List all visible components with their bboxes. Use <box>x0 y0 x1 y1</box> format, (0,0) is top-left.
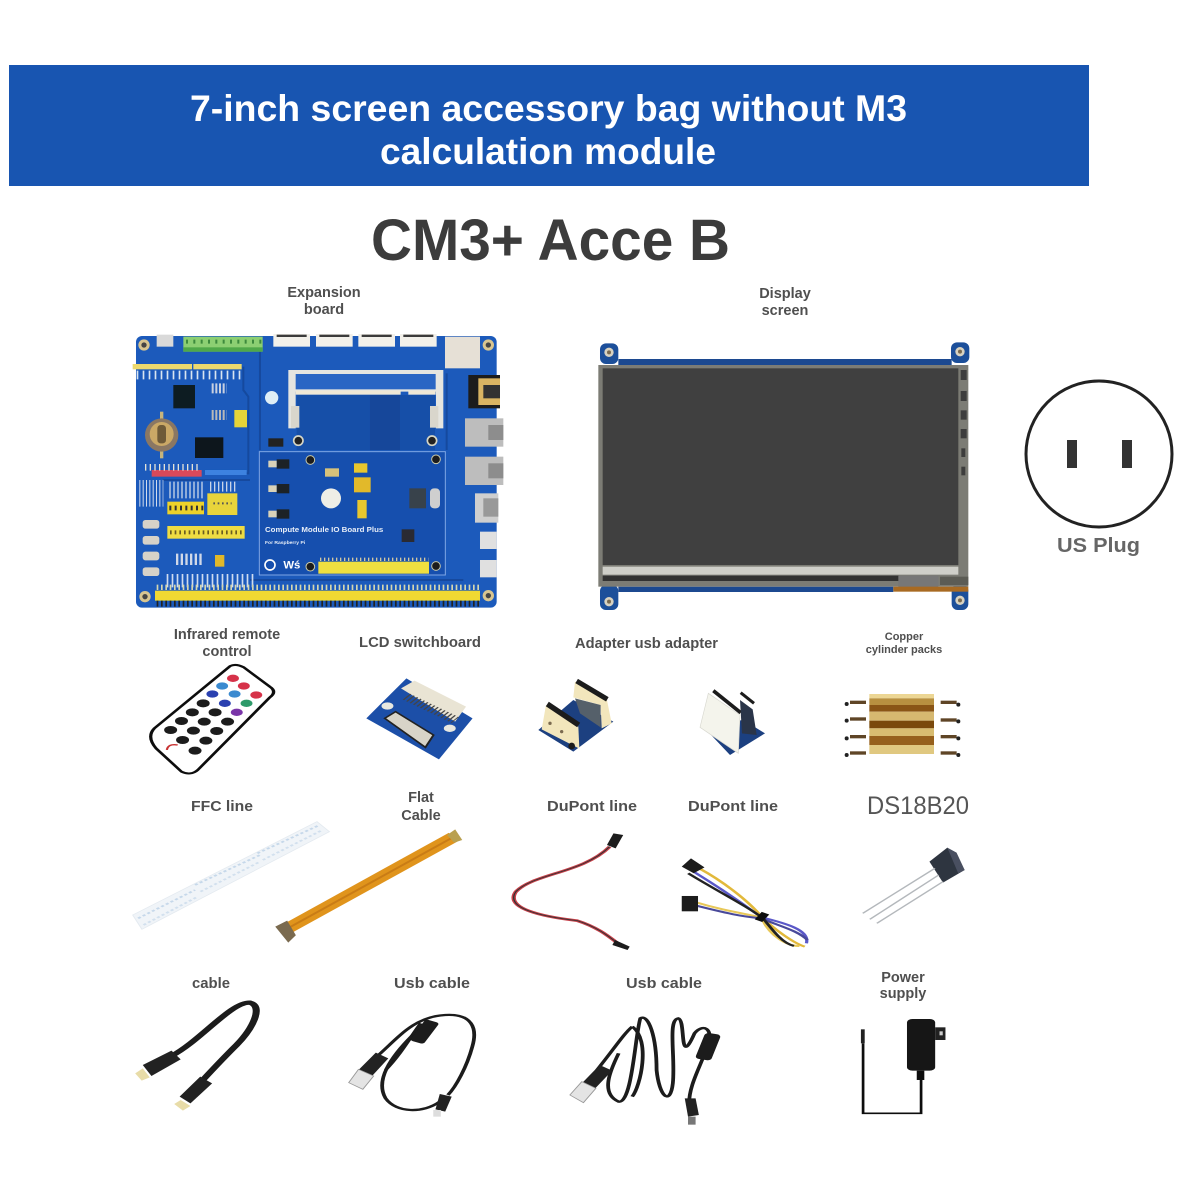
label: DuPont line 2: DuPont line <box>688 799 778 815</box>
SODIMM socket <box>288 370 443 428</box>
photo: display screen <box>598 342 969 610</box>
label: flat cable: Flat <box>408 790 434 806</box>
label: power supply: Power <box>881 970 925 986</box>
label: expansion board: Expansion <box>287 285 361 301</box>
icon: US plug <box>1026 381 1172 527</box>
photo: DuPont wire 2 <box>682 858 808 947</box>
label: FFC line: FFC line <box>191 799 253 815</box>
label: display screen: Display <box>759 286 811 302</box>
photo: LCD switchboard <box>366 678 473 759</box>
photo: HDMI cable <box>135 1003 256 1111</box>
USB ports <box>465 418 503 485</box>
left cluster headers <box>152 470 202 477</box>
photo: FFC ribbon <box>133 822 329 929</box>
label: Usb cable 1: Usb cable <box>394 976 470 992</box>
label: US Plug: US Plug <box>1057 535 1140 557</box>
battery holder <box>160 412 163 458</box>
holes <box>138 339 494 602</box>
photo: copper cylinders <box>845 694 960 757</box>
label: copper cylinder packs <box>866 631 942 656</box>
title banner: calculation module <box>380 131 716 172</box>
photo: adapter 2 <box>700 691 765 755</box>
photo: DuPont wire 1 <box>514 833 630 950</box>
headers <box>133 364 192 369</box>
label: DS18B20: DS18B20 <box>867 792 969 820</box>
label: expansion board: board <box>304 302 344 318</box>
photo: DS18B20 sensor <box>863 848 965 923</box>
photo: infrared remote <box>151 665 274 773</box>
photo: expansion board <box>133 334 503 608</box>
label: LCD switchboard: LCD switchboard <box>359 635 481 651</box>
label: flat cable <box>401 790 441 824</box>
photo: Usb cable 1 <box>349 1015 474 1117</box>
photo: adapter 1 <box>538 681 613 752</box>
title banner: 7-inch screen accessory bag without M3 <box>190 88 907 129</box>
chips <box>173 385 195 408</box>
label: display screen <box>759 286 811 319</box>
label: copper cylinder packs: Copper <box>885 631 924 643</box>
label: DuPont line 1: DuPont line <box>547 799 637 815</box>
label: cable: cable <box>192 976 230 992</box>
photo: power supply <box>861 1019 945 1113</box>
sub board <box>259 452 445 575</box>
photo: expansion board: Wś <box>283 559 300 571</box>
label: infrared remote control: control <box>202 644 252 660</box>
label: power supply: supply <box>880 986 926 1002</box>
label: adapter usb adapter: Adapter usb adapter <box>575 636 718 652</box>
label: display screen: screen <box>762 303 808 319</box>
photo: expansion board: For Raspberry Pi <box>265 540 306 546</box>
photo: flat orange cable <box>275 829 462 943</box>
label: Usb cable 2: Usb cable <box>626 976 702 992</box>
label: expansion board <box>287 285 361 318</box>
label: flat cable: Cable <box>401 808 441 824</box>
photo: Usb cable 2 <box>570 1018 721 1125</box>
label: power supply <box>880 970 926 1002</box>
label: copper cylinder packs: cylinder packs <box>866 644 942 656</box>
bottom header <box>167 561 257 601</box>
product heading: CM3+ Acce B <box>371 208 730 273</box>
label: infrared remote control <box>174 627 280 660</box>
label: infrared remote control: Infrared remote <box>174 627 280 643</box>
photo: expansion board: Compute Module IO Board Plus <box>265 525 383 534</box>
top connectors <box>157 335 173 347</box>
title banner <box>9 65 1089 186</box>
